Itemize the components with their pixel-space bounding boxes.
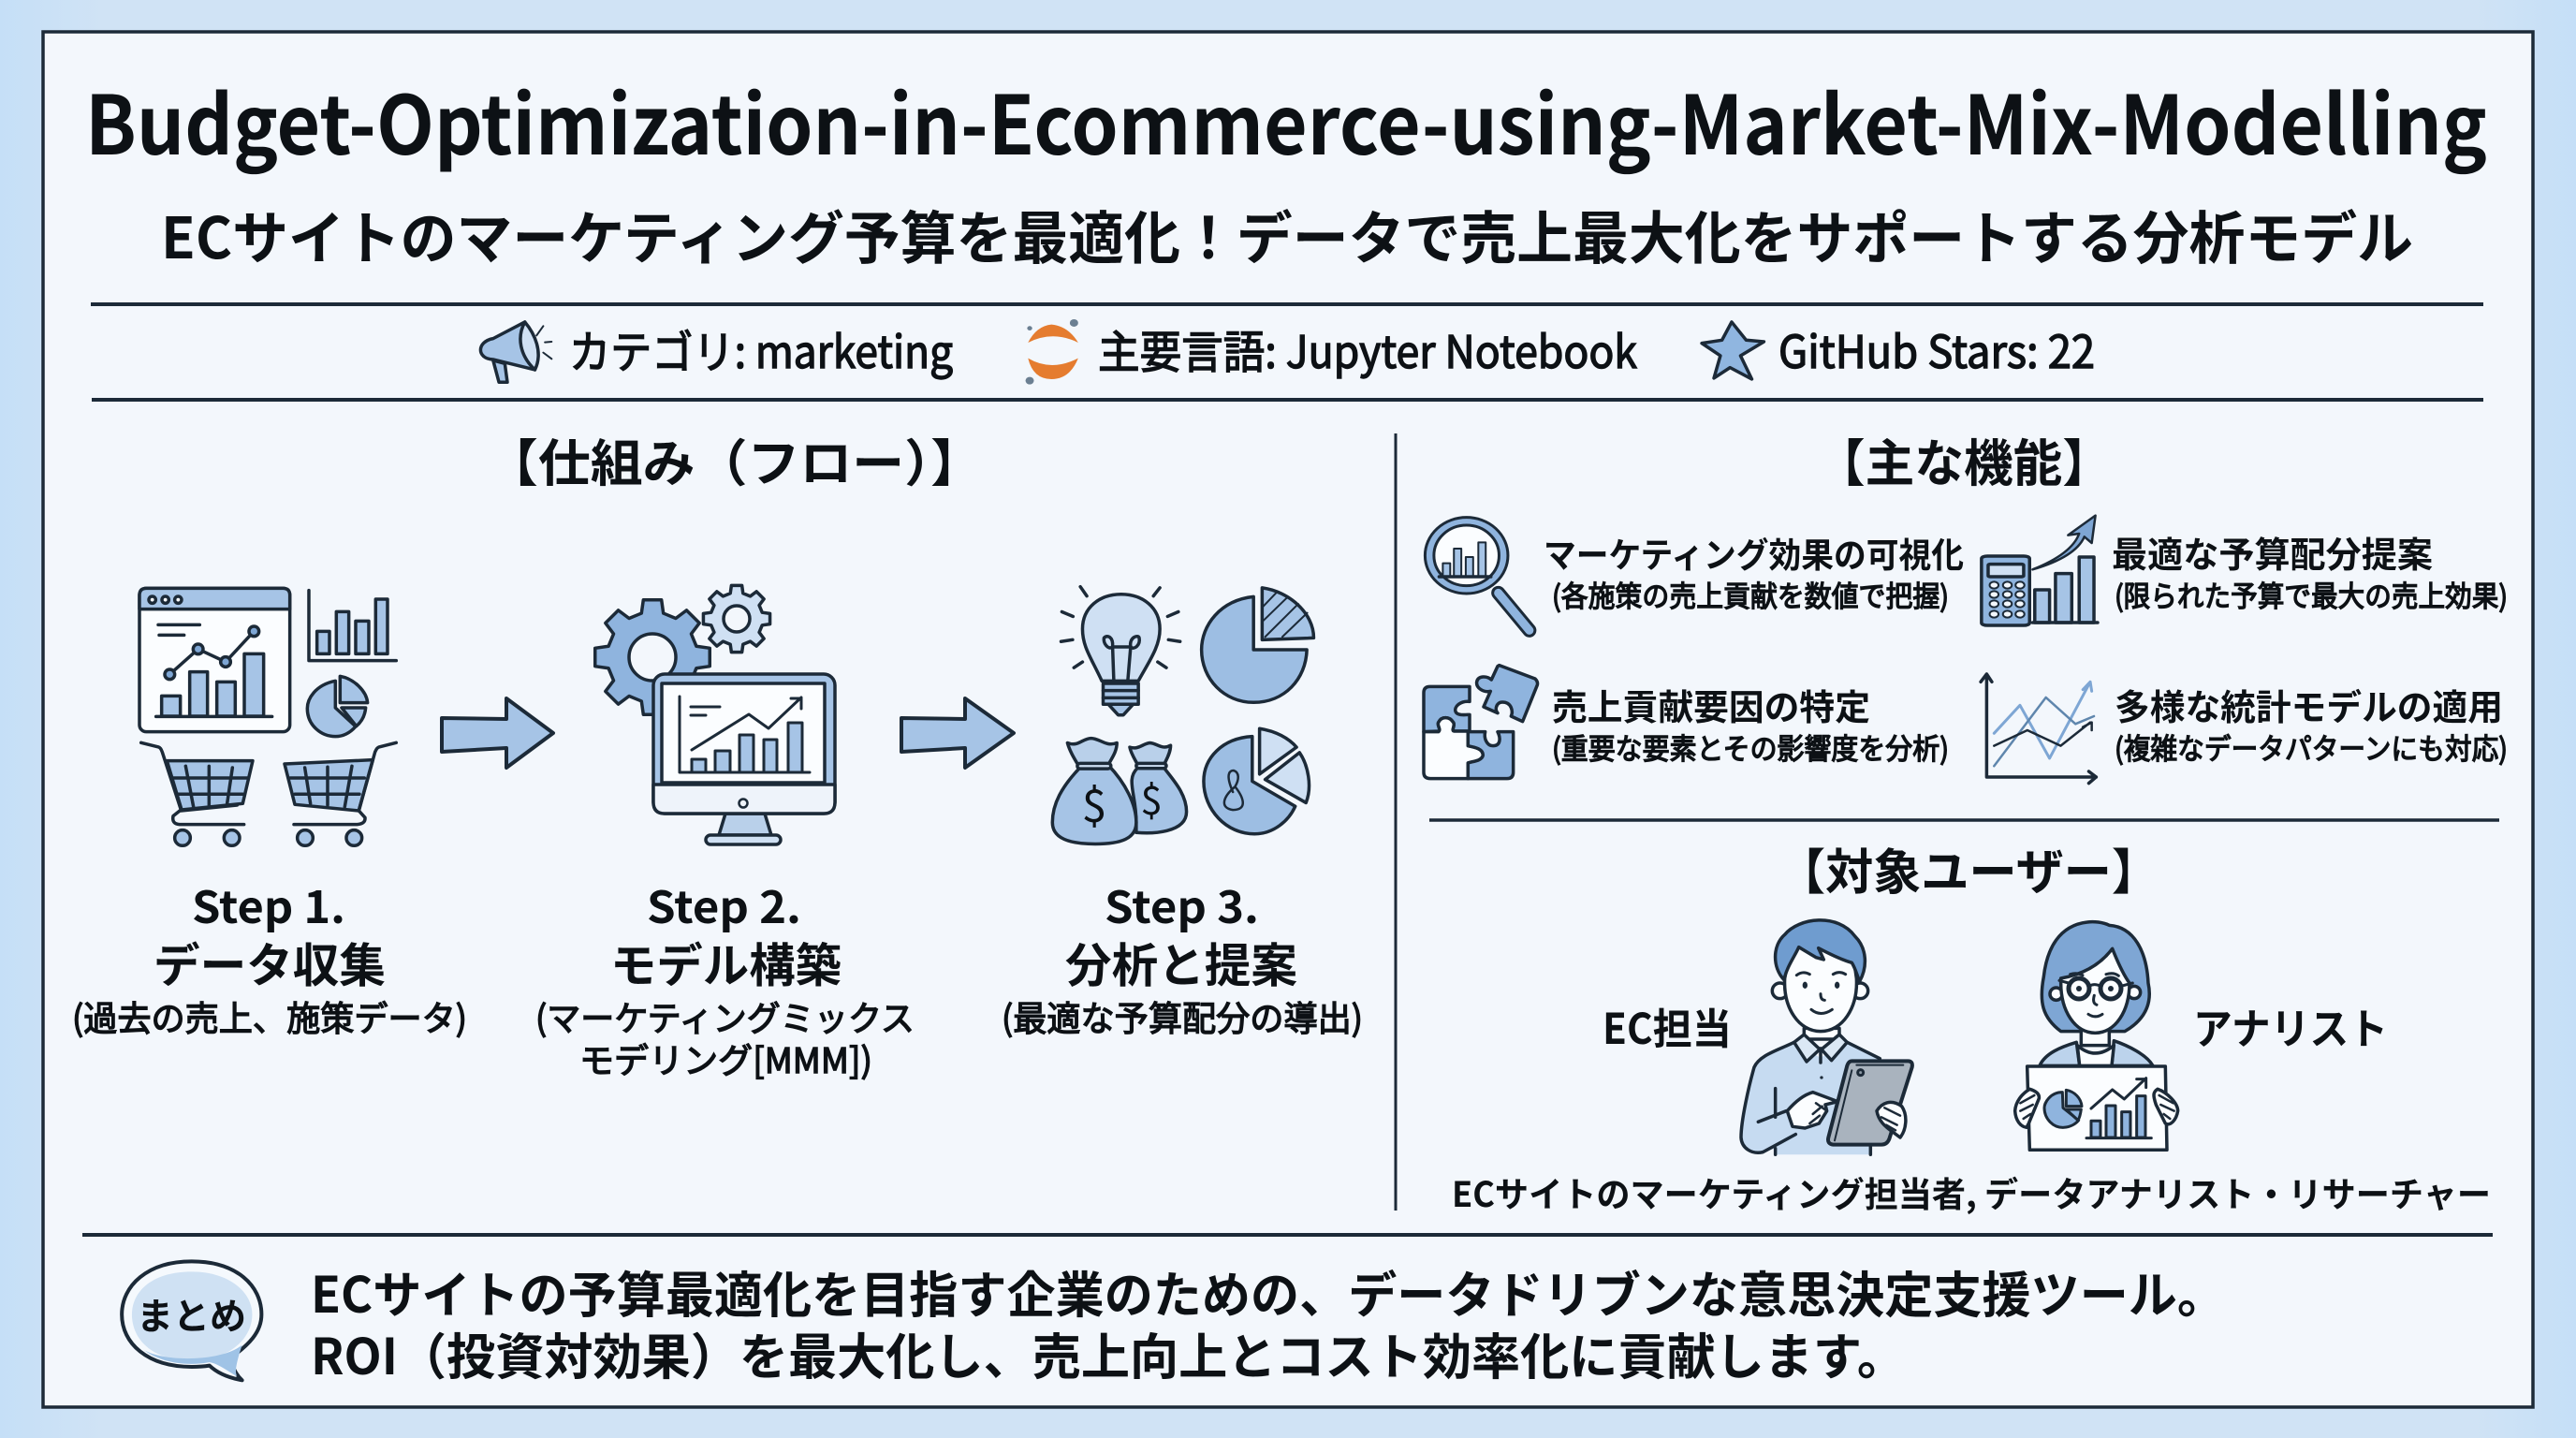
heading: features: 【主な機能】 xyxy=(1816,422,2112,496)
step 3 text xyxy=(1002,872,1363,1041)
summary text: ECサイトの予算最適化を目指す企業のための、データドリブンな意思決定支援ツール。 xyxy=(311,1256,2226,1328)
icon: speech bubble xyxy=(122,1261,261,1380)
feature: contribution factors xyxy=(1552,679,1949,768)
panel: features xyxy=(1424,422,2508,784)
label: EC manager: EC担当 xyxy=(1603,995,1732,1056)
feature: statistical models xyxy=(2115,679,2508,768)
summary text xyxy=(311,1256,2226,1389)
icon: calculator and growth xyxy=(1982,516,2098,625)
icon: jupyter xyxy=(1026,319,1078,385)
label: analyst: アナリスト xyxy=(2193,995,2388,1056)
icon: megaphone xyxy=(480,322,551,382)
icon: step 1 data collection xyxy=(139,588,396,845)
step 3 text: (最適な予算配分の導出) xyxy=(1002,990,1363,1041)
panel: summary xyxy=(122,1256,2226,1389)
feature: budget allocation: (限られた予算で最大の売上効果) xyxy=(2115,573,2508,615)
feature: statistical models: 多様な統計モデルの適用 xyxy=(2115,679,2503,730)
feature: contribution factors: 売上貢献要因の特定 xyxy=(1552,679,1870,730)
step 2 text: モデリング[MMM]) xyxy=(579,1033,872,1083)
icon: analyst person xyxy=(2015,922,2178,1150)
icon: magnifier xyxy=(1425,518,1530,630)
feature: contribution factors: (重要な要素とその影響度を分析) xyxy=(1552,726,1949,768)
step 2 text: (マーケティングミックス xyxy=(535,990,915,1041)
step 1 text: Step 1. xyxy=(192,872,345,936)
heading: target users: 【対象ユーザー】 xyxy=(1778,833,2159,903)
icon: statistical models chart xyxy=(1981,674,2096,784)
panel: target users xyxy=(1452,833,2491,1217)
heading: flow: 【仕組み（フロー）】 xyxy=(486,422,983,496)
icon: step 2 model building xyxy=(595,585,835,844)
bubble label: まとめ xyxy=(137,1288,246,1341)
summary text: ROI（投資対効果）を最大化し、売上向上とコスト効率化に貢献します。 xyxy=(311,1318,1906,1389)
icon: puzzle xyxy=(1424,666,1538,779)
meta: language: 主要言語: Jupyter Notebook xyxy=(1098,315,1637,381)
step 1 text xyxy=(72,872,467,1041)
icon: EC manager person xyxy=(1741,920,1912,1154)
subtitle: ECサイトのマーケティング予算を最適化！データで売上最大化をサポートする分析モデル xyxy=(161,192,2413,275)
feature: visualization: マーケティング効果の可視化 xyxy=(1544,527,1964,578)
target users description: ECサイトのマーケティング担当者, データアナリスト・リサーチャー xyxy=(1452,1167,2491,1217)
icon: star xyxy=(1702,322,1764,379)
meta: category: カテゴリ: marketing xyxy=(569,315,953,381)
feature: visualization: (各施策の売上貢献を数値で把握) xyxy=(1552,573,1949,615)
step 2 text xyxy=(535,872,915,1083)
arrow: step 1 to 2 xyxy=(442,698,553,768)
feature: budget allocation: 最適な予算配分提案 xyxy=(2112,526,2433,578)
step 3 text: 分析と提案 xyxy=(1065,929,1297,996)
icon: step 3 analysis: $ xyxy=(1140,770,1163,827)
step 1 text: データ収集 xyxy=(154,929,386,996)
feature: budget allocation xyxy=(2112,526,2508,615)
icon glyphs: dollar signs: $ xyxy=(1082,770,1106,835)
panel: flow xyxy=(72,422,1363,1083)
step 3 text: Step 3. xyxy=(1105,872,1259,936)
feature: statistical models: (複雑なデータパターンにも対応) xyxy=(2115,726,2508,768)
step 1 text: (過去の売上、施策データ) xyxy=(72,990,467,1041)
step 2 text: Step 2. xyxy=(647,872,801,936)
feature: visualization xyxy=(1544,527,1964,615)
step 2 text: モデル構築 xyxy=(610,929,842,996)
meta: stars: GitHub Stars: 22 xyxy=(1778,315,2095,381)
arrow: step 2 to 3 xyxy=(901,698,1014,768)
icon: step 3 analysis xyxy=(1052,587,1313,844)
meta row xyxy=(480,315,2095,385)
